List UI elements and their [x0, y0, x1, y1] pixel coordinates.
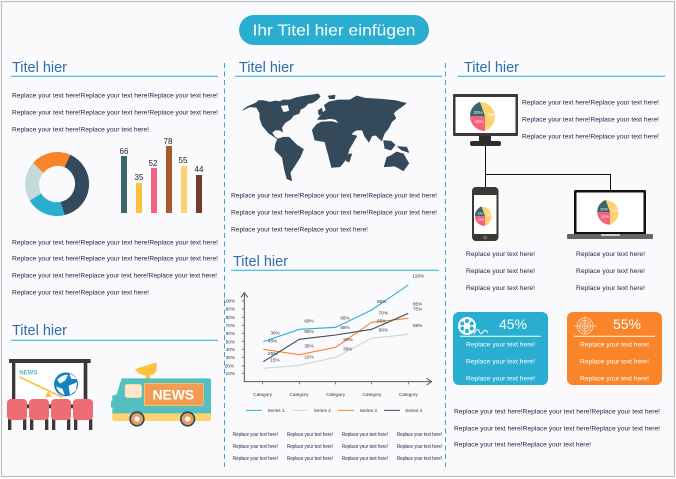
line chart: 22%	[304, 355, 314, 360]
text block: middle: Replace your text here!Replace your text here!	[231, 226, 368, 234]
icon: smartphone with pie	[472, 187, 498, 241]
line chart: 20%	[225, 364, 234, 369]
line chart: Category	[326, 392, 346, 397]
connector lines between devices	[486, 146, 610, 190]
line chart: 35%	[304, 344, 314, 349]
panel: orange stat card: Replace your text here!	[580, 376, 649, 382]
text block: beside monitor	[522, 100, 659, 140]
panel: orange stat card: Replace your text here!	[580, 342, 649, 348]
text block: under laptop: Replace your text here!	[576, 268, 645, 275]
icon: laptop with pie	[567, 190, 653, 239]
line chart: 25%	[268, 351, 277, 356]
line chart: Category	[253, 392, 273, 397]
text block: left lower: Replace your text here!Replace your text here!Replace your text here!	[12, 240, 218, 246]
panel: blue stat card: Replace your text here!	[466, 342, 535, 348]
text block: chart captions: Replace your text here!	[342, 432, 388, 438]
text block: left lower: Replace your text here!Replace your text here!Replace your text here!	[12, 256, 218, 262]
text block: chart captions: Replace your text here!	[397, 444, 442, 450]
title: Ihr Titel hier einfügen	[252, 22, 416, 40]
line chart: 30%	[343, 347, 352, 352]
text block: middle	[231, 192, 437, 234]
icon: target	[574, 316, 597, 335]
line chart: Category	[399, 392, 418, 397]
text block: chart captions: Replace your text here!	[233, 456, 278, 462]
text block: right bottom: Replace your text here!Replace your text here!Replace your text here!	[454, 408, 660, 416]
line chart: 65%	[377, 318, 386, 323]
line chart: 90%	[226, 307, 235, 312]
line chart: 60%	[304, 319, 314, 324]
text block: under phone: Replace your text here!	[466, 268, 535, 275]
heading: chart: Titel hier	[233, 253, 288, 270]
text block: right bottom	[454, 408, 660, 448]
line chart: 80%	[226, 315, 235, 320]
text block: chart captions: Replace your text here!	[233, 444, 278, 450]
text block: left lower	[12, 240, 218, 296]
line chart: 30%	[226, 355, 235, 360]
text block: beside monitor: Replace your text here!Replace your text here!	[522, 100, 659, 106]
panel: orange stat card: 55%	[613, 316, 641, 332]
icon: desktop monitor with pie	[453, 94, 518, 146]
line chart: Category	[363, 392, 382, 397]
bar chart: 52	[149, 159, 158, 168]
line chart: 50%	[304, 329, 314, 334]
icon: film reel	[458, 317, 488, 335]
line chart: Series 1	[267, 408, 285, 413]
text block: chart captions: Replace your text here!	[287, 432, 333, 438]
line chart: 58%	[413, 323, 422, 328]
text block: left intro: Replace your text here!Replace your text here!Replace your text here!	[12, 110, 218, 116]
bar chart: 78	[164, 137, 173, 146]
icon: cinema screen with seats	[7, 359, 93, 430]
bar chart	[120, 137, 204, 213]
panel: blue stat card: Replace your text here!	[466, 376, 535, 382]
text block: under laptop	[576, 251, 645, 292]
heading: right column: Titel hier	[464, 59, 519, 76]
icon: smartphone with pie: 25%	[478, 218, 484, 222]
text block: left intro: Replace your text here!Replace your text here!	[12, 126, 149, 134]
text block: chart captions: Replace your text here!	[397, 456, 442, 462]
text block: under phone: Replace your text here!	[466, 251, 535, 258]
icon: smartphone with pie: 20%	[477, 212, 484, 216]
line chart: 85%	[413, 302, 422, 307]
bar chart: 35	[135, 173, 144, 182]
line chart: 50%	[226, 339, 235, 344]
text block: left lower: Replace your text here!Replace your text here!Replace your text here!	[12, 272, 217, 280]
text block: under phone: Replace your text here!	[466, 285, 535, 292]
text block: right bottom: Replace your text here!Replace your text here!	[454, 442, 591, 448]
panel: blue stat card	[453, 312, 548, 385]
panel: orange stat card	[567, 312, 662, 385]
line chart: 40%	[226, 347, 235, 352]
text block: under laptop: Replace your text here!	[576, 285, 645, 292]
panel: blue stat card: Replace your text here!	[466, 358, 535, 366]
icon: laptop with pie: 20%	[600, 207, 608, 211]
text block: middle: Replace your text here!Replace your text here!Replace your text here!	[231, 192, 437, 200]
heading: left column top: Titel hier	[12, 59, 67, 76]
panel: blue stat card: 45%	[499, 316, 527, 332]
line chart: 66%	[340, 316, 350, 321]
heading: left column bottom: Titel hier	[12, 322, 67, 339]
text block: chart captions: Replace your text here!	[342, 456, 388, 462]
line chart: 100%	[223, 299, 235, 304]
line chart: 15%	[270, 358, 280, 363]
line chart: Series 3	[360, 408, 377, 413]
text block: chart captions: Replace your text here!	[233, 432, 278, 438]
line chart: 50%	[379, 328, 388, 333]
bar chart: 44	[195, 165, 204, 174]
panel: orange stat card: Replace your text here!	[580, 358, 649, 366]
text block: chart captions: Replace your text here!	[287, 456, 333, 462]
line chart: Category	[290, 392, 309, 397]
icon: desktop monitor with pie: 25%	[474, 119, 484, 124]
line chart	[223, 274, 432, 413]
text block: chart captions	[233, 432, 442, 462]
icon: laptop with pie: 25%	[601, 215, 609, 219]
line chart: Series 2	[314, 408, 331, 413]
line chart: 10%	[226, 371, 235, 376]
heading: middle column top: Titel hier	[239, 59, 294, 76]
title	[239, 15, 429, 45]
line chart: 40%	[268, 339, 277, 344]
world map	[243, 94, 409, 181]
line chart: 58%	[340, 325, 350, 330]
icon: laptop with pie: 55%	[613, 209, 621, 213]
text block: middle: Replace your text here!Replace your text here!Replace your text here!	[231, 210, 437, 216]
icon: cinema screen with seats: NEWS	[19, 371, 37, 377]
text block: beside monitor: Replace your text here!Replace your text here!	[522, 134, 659, 140]
line chart: Series 4	[405, 408, 423, 413]
icon: smartphone with pie: 55%	[487, 213, 494, 217]
text block: under phone	[466, 251, 535, 292]
line chart: 70%	[226, 323, 235, 328]
text block: chart captions: Replace your text here!	[397, 432, 442, 438]
text block: left intro	[12, 92, 218, 134]
icon: desktop monitor with pie: 20%	[473, 110, 483, 115]
line chart: 60%	[226, 331, 235, 336]
bar chart: 66	[120, 147, 129, 156]
text block: left intro: Replace your text here!Replace your text here!Replace your text here!	[12, 92, 218, 100]
icon: news van	[111, 362, 211, 427]
icon: desktop monitor with pie: 55%	[488, 112, 498, 117]
text block: under laptop: Replace your text here!	[576, 251, 645, 258]
text block: left lower: Replace your text here!Replace your text here!	[12, 290, 149, 296]
text block: beside monitor: Replace your text here!Replace your text here!	[522, 116, 659, 124]
text block: chart captions: Replace your text here!	[342, 444, 388, 450]
text block: chart captions: Replace your text here!	[287, 444, 333, 450]
line chart: 70%	[379, 311, 388, 316]
line chart: 85%	[377, 299, 386, 304]
donut chart	[25, 152, 89, 216]
line chart: 75%	[413, 307, 422, 312]
text block: right bottom: Replace your text here!Replace your text here!Replace your text here!	[454, 426, 660, 432]
line chart: 120%	[412, 274, 424, 279]
line chart: 50%	[343, 337, 353, 342]
icon: news van: NEWS	[152, 387, 194, 403]
bar chart: 55	[179, 156, 188, 165]
line chart: 30%	[270, 331, 280, 336]
